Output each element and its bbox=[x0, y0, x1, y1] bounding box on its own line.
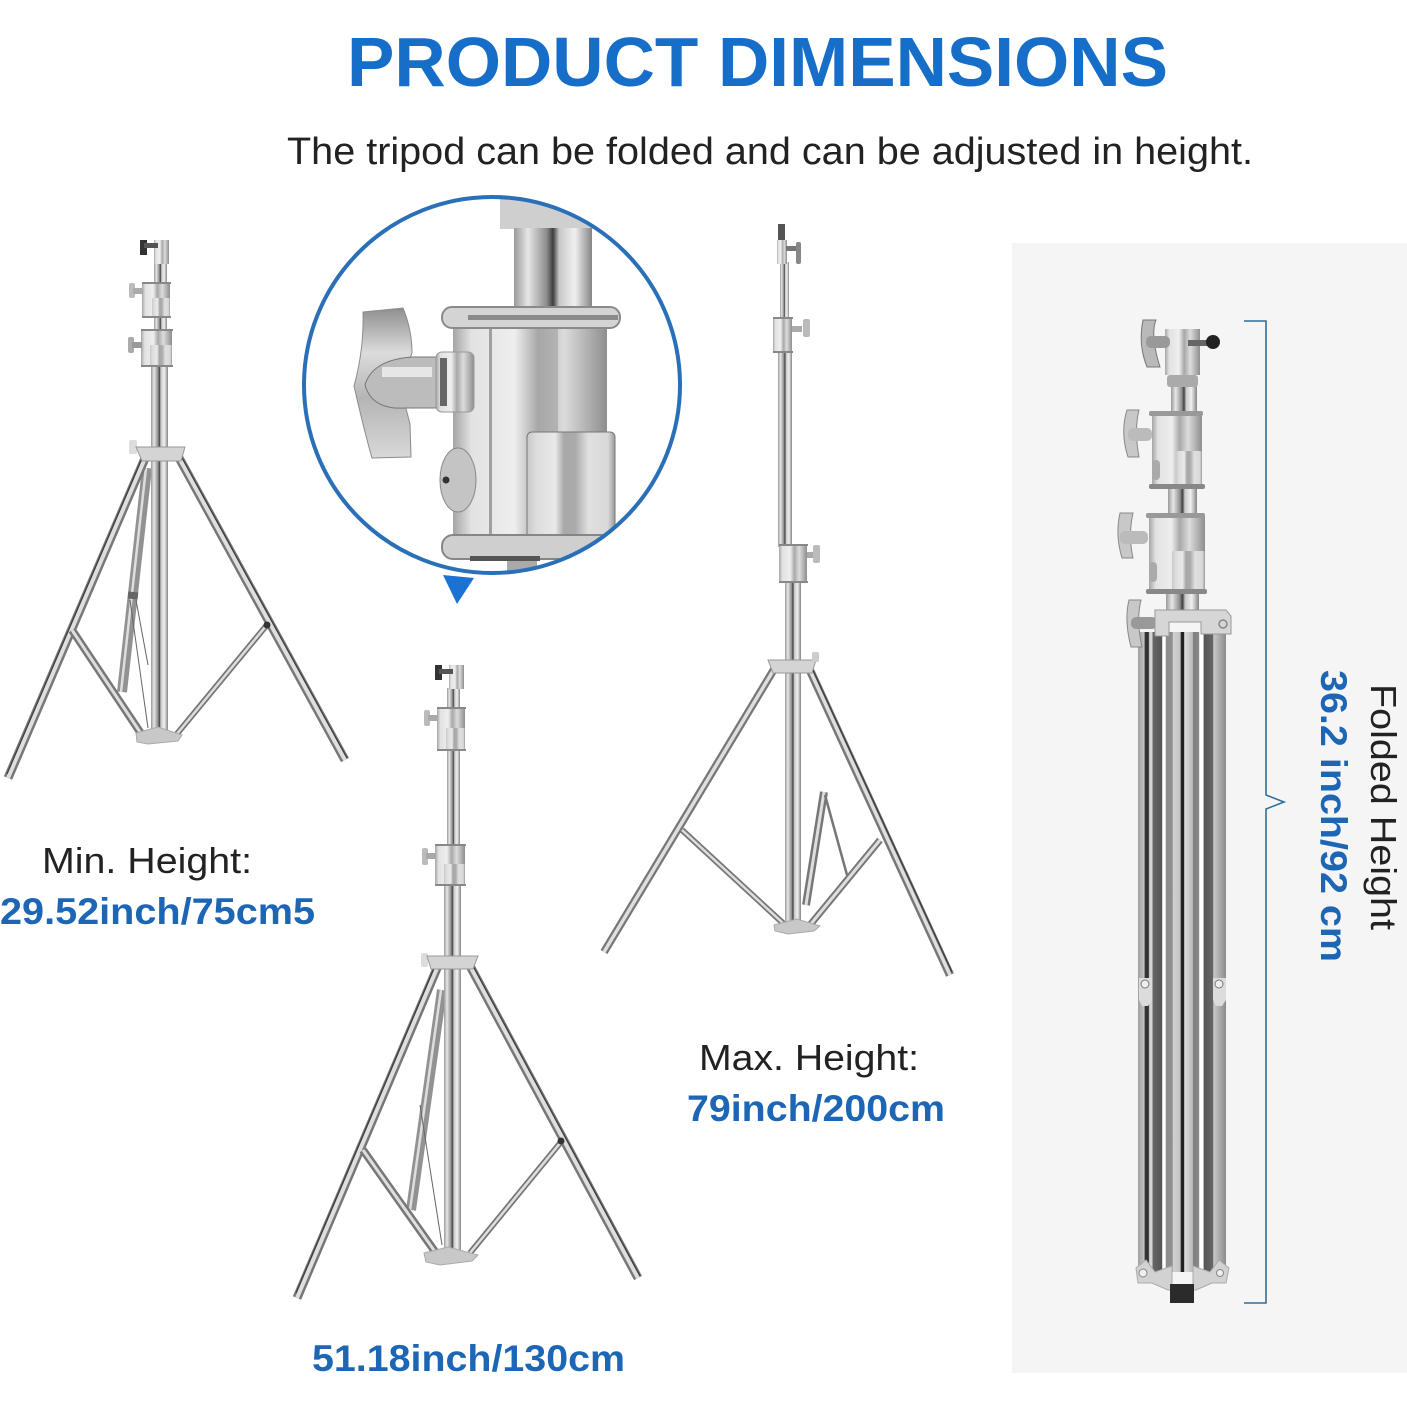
label: max height: Max. Height: bbox=[699, 1037, 919, 1078]
title: PRODUCT DIMENSIONS bbox=[347, 23, 1168, 101]
leg bracket bbox=[768, 652, 819, 673]
base bbox=[136, 727, 182, 744]
lower collar bbox=[1146, 513, 1207, 594]
head bbox=[777, 224, 801, 264]
knobs bbox=[422, 710, 438, 865]
base bbox=[774, 919, 820, 934]
head bbox=[140, 240, 169, 264]
leg bracket bbox=[421, 953, 478, 969]
label: middle height: 51.18inch/130cm bbox=[312, 1338, 625, 1379]
left leg bbox=[7, 456, 146, 778]
braces bbox=[363, 1138, 564, 1253]
braces bbox=[682, 830, 880, 925]
right leg bbox=[470, 966, 640, 1278]
centre column bbox=[151, 366, 168, 734]
centre column bbox=[785, 582, 801, 927]
braces bbox=[72, 622, 270, 735]
rear leg bbox=[121, 468, 148, 728]
tripod at middle height bbox=[296, 665, 640, 1298]
right leg bbox=[808, 666, 952, 975]
upper tubes bbox=[773, 262, 808, 583]
label: min height bbox=[0, 840, 315, 932]
centre tubes bbox=[1166, 385, 1199, 611]
left leg bbox=[604, 666, 776, 952]
hinges bbox=[1139, 978, 1226, 1006]
panel: folded height bbox=[1012, 243, 1407, 1373]
upper collar bbox=[1149, 411, 1205, 489]
pointer triangle bbox=[443, 575, 474, 604]
tripod at minimum height bbox=[7, 240, 347, 778]
label: min height: Min. Height: bbox=[42, 840, 252, 881]
dimension bracket bbox=[1244, 321, 1284, 1303]
label: folded height: Folded Height bbox=[1363, 684, 1404, 930]
rubber foot bbox=[1170, 1284, 1194, 1303]
folded tripod bbox=[1118, 320, 1231, 1303]
upper tubes bbox=[435, 688, 466, 886]
value: max height: 79inch/200cm bbox=[687, 1088, 945, 1129]
centre column bbox=[444, 885, 461, 1253]
head bbox=[435, 665, 464, 689]
leg bracket bbox=[129, 440, 185, 461]
top bracket bbox=[1155, 610, 1231, 636]
head bbox=[1165, 329, 1220, 387]
value: folded height: 36.2 inch/92 cm bbox=[1313, 670, 1354, 962]
label: max height bbox=[687, 1037, 945, 1129]
knobs bbox=[128, 283, 143, 353]
rear leg bbox=[806, 792, 847, 905]
knobs bbox=[1118, 320, 1170, 647]
left leg bbox=[296, 966, 438, 1298]
subtitle: The tripod can be folded and can be adjusted in height. bbox=[287, 131, 1253, 173]
wing knob bbox=[354, 308, 474, 458]
tripod at maximum height bbox=[604, 224, 952, 975]
callout: close-up of the lock knob bbox=[304, 190, 680, 604]
base bbox=[424, 1247, 478, 1265]
folded legs bbox=[1138, 632, 1226, 1272]
right leg bbox=[178, 456, 347, 760]
screw bbox=[440, 448, 476, 512]
close-up parts bbox=[442, 190, 620, 580]
rear leg bbox=[410, 990, 442, 1245]
bottom bracket bbox=[1136, 1260, 1229, 1290]
knobs bbox=[792, 319, 820, 563]
circle ring bbox=[304, 197, 680, 573]
panel background bbox=[1012, 243, 1407, 1373]
upper tubes bbox=[141, 262, 173, 367]
value: min height: 29.52inch/75cm5 bbox=[0, 891, 315, 932]
